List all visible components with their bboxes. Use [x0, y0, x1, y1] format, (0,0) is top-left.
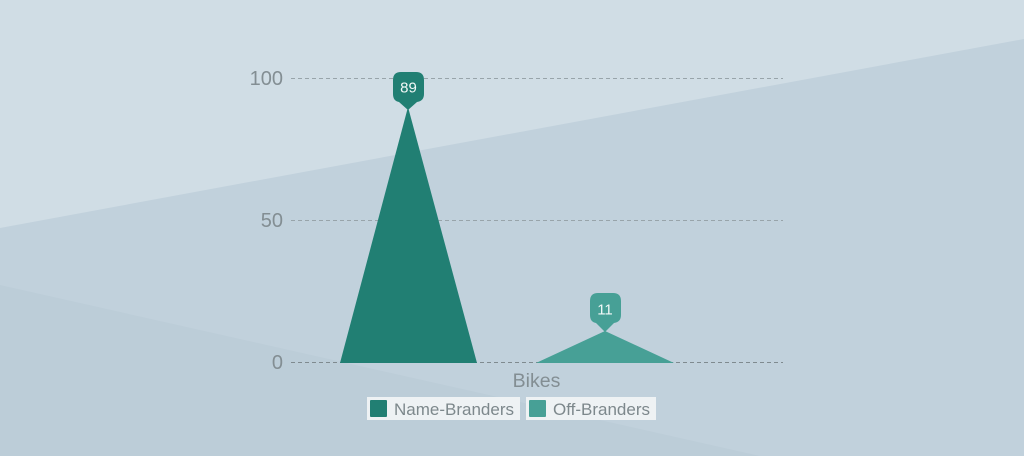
y axis labels: 50 — [261, 210, 283, 232]
y axis labels: 100 — [250, 68, 283, 90]
y axis labels — [250, 68, 283, 374]
legend item: Name-Branders — [367, 397, 520, 420]
legend item: Off-Branders — [526, 397, 656, 420]
x axis label: Bikes — [513, 370, 561, 392]
callout: 89: 89 — [400, 80, 417, 96]
legend item: Name-Branders: Name-Branders — [394, 400, 514, 419]
callout: 11 — [590, 293, 621, 332]
legend — [367, 397, 656, 420]
chart: gridlines — [291, 78, 783, 362]
callout: 89 — [393, 72, 424, 110]
triangle: Off-Branders 11 — [536, 331, 674, 363]
callout: 11: 11 — [597, 302, 613, 318]
legend item: Off-Branders: Off-Branders — [553, 400, 650, 419]
triangle: Name-Branders 89 — [340, 107, 477, 363]
y axis labels: 0 — [272, 352, 283, 374]
